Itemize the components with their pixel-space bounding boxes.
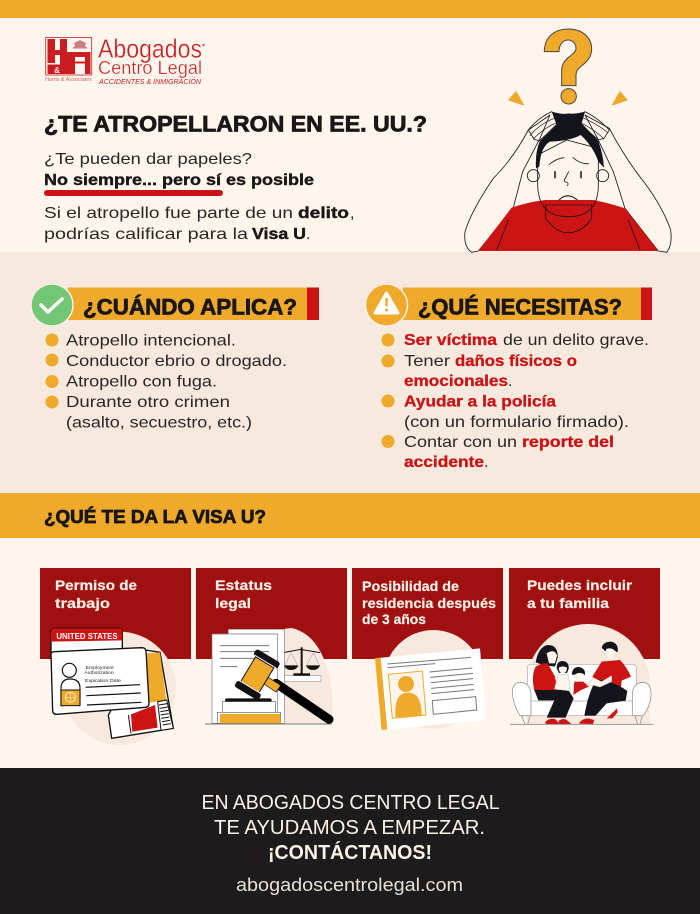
card: familia: Puedes incluir: [527, 577, 633, 593]
intro text: [44, 151, 354, 243]
list: requirements: [382, 332, 649, 471]
illustration: work permit: Expiration Date: [85, 678, 122, 683]
card: permiso de trabajo: Permiso de: [55, 577, 137, 593]
figure: [465, 112, 671, 252]
footer: ¡CONTÁCTANOS!: [268, 841, 432, 864]
intro text: .: [306, 226, 310, 243]
list: requirements: (con un formulario firmado).: [404, 414, 629, 431]
list: cases: [46, 332, 287, 432]
heading bar: [68, 288, 319, 320]
heading bar: ¿CUÁNDO APLICA?: [83, 294, 297, 320]
footer: [0, 768, 700, 914]
list: requirements: accidente: [404, 454, 484, 471]
heading bar: [403, 288, 652, 320]
logo: [45, 34, 205, 86]
list: requirements: reporte del: [522, 434, 614, 451]
list: cases: (asalto, secuestro, etc.): [66, 414, 252, 432]
logo: ACCIDENTES & INMIGRACIÓN: [98, 77, 202, 86]
logo: &: [54, 66, 60, 75]
list: requirements: Ayudar a la policía: [404, 394, 556, 410]
heading bar: ¿QUÉ NECESITAS?: [418, 294, 622, 320]
panel: conditions background: [0, 252, 700, 493]
list: requirements: daños físicos o: [455, 353, 577, 370]
intro text: podrías calificar para la: [44, 226, 248, 243]
card: estatus legal: [196, 568, 347, 724]
top band: [0, 0, 700, 18]
list: cases: Atropello intencional.: [66, 332, 236, 350]
intro text: delito: [298, 205, 349, 222]
woman: [536, 645, 558, 667]
illustration: work permit: Authorization: [84, 670, 114, 675]
intro text: No siempre... pero sí es posible: [44, 172, 314, 189]
list: requirements: de un delito grave.: [503, 332, 649, 349]
panel: cuándo aplica: [31, 284, 319, 432]
list: requirements: Ser víctima: [404, 332, 497, 349]
list: requirements: Contar con un: [404, 434, 517, 451]
footer: TE AYUDAMOS A EMPEZAR.: [214, 817, 485, 839]
section banner: ¿QUÉ TE DA LA VISA U?: [44, 506, 266, 527]
panel: qué necesitas: [366, 284, 652, 471]
title: ¿TE ATROPELLARON EN EE. UU.?: [44, 112, 427, 136]
illustration: passport document: [375, 630, 486, 730]
card: familia: [509, 568, 660, 724]
card: familia: a tu familia: [527, 595, 609, 611]
man: [602, 642, 618, 652]
intro text: ,: [350, 205, 354, 222]
girl: [557, 661, 569, 673]
list: requirements: emocionales: [404, 373, 508, 390]
illustration: family on sofa: [510, 624, 653, 724]
illustration: work permit: [51, 628, 176, 745]
list: cases: Durante otro crimen: [66, 394, 230, 411]
card: estatus legal: legal: [215, 595, 251, 611]
illustration: work permit: UNITED STATES: [56, 632, 118, 641]
list: cases: Conductor ebrio o drogado.: [66, 353, 287, 370]
card: residencia: de 3 años: [362, 611, 426, 627]
card: residencia: residencia después: [362, 595, 496, 611]
logo: Abogados: [98, 34, 202, 64]
list: requirements: .: [484, 454, 488, 471]
icon: question mark: [544, 29, 592, 104]
intro text: Si el atropello fue parte de un: [44, 205, 293, 222]
section banner: [0, 493, 700, 538]
card: permiso de trabajo: [40, 568, 191, 745]
list: cases: Atropello con fuga.: [66, 374, 217, 390]
intro text: ¿Te pueden dar papeles?: [44, 151, 252, 168]
intro text: Visa U: [252, 226, 306, 243]
icon: right spark: [612, 92, 627, 105]
footer: abogadoscentrolegal.com: [236, 875, 463, 895]
icon: warning: [366, 284, 408, 326]
icon: green check: [31, 284, 73, 326]
logo: Harris & Associates: [45, 77, 93, 83]
boy: [572, 667, 585, 676]
card: permiso de trabajo: trabajo: [55, 595, 110, 611]
list: requirements: .: [508, 373, 512, 390]
illustration: gavel and scale: [205, 628, 333, 724]
icon: left spark: [509, 92, 524, 105]
list: requirements: Tener: [404, 353, 451, 370]
illustration: work permit: Employment: [86, 665, 114, 670]
illustration: worried man with question mark: [465, 29, 671, 252]
card: estatus legal: Estatus: [215, 577, 272, 593]
logo: Centro Legal: [98, 58, 202, 78]
card: residencia: Posibilidad de: [362, 578, 459, 594]
card: residencia: [352, 568, 503, 730]
footer: EN ABOGADOS CENTRO LEGAL: [202, 792, 500, 814]
